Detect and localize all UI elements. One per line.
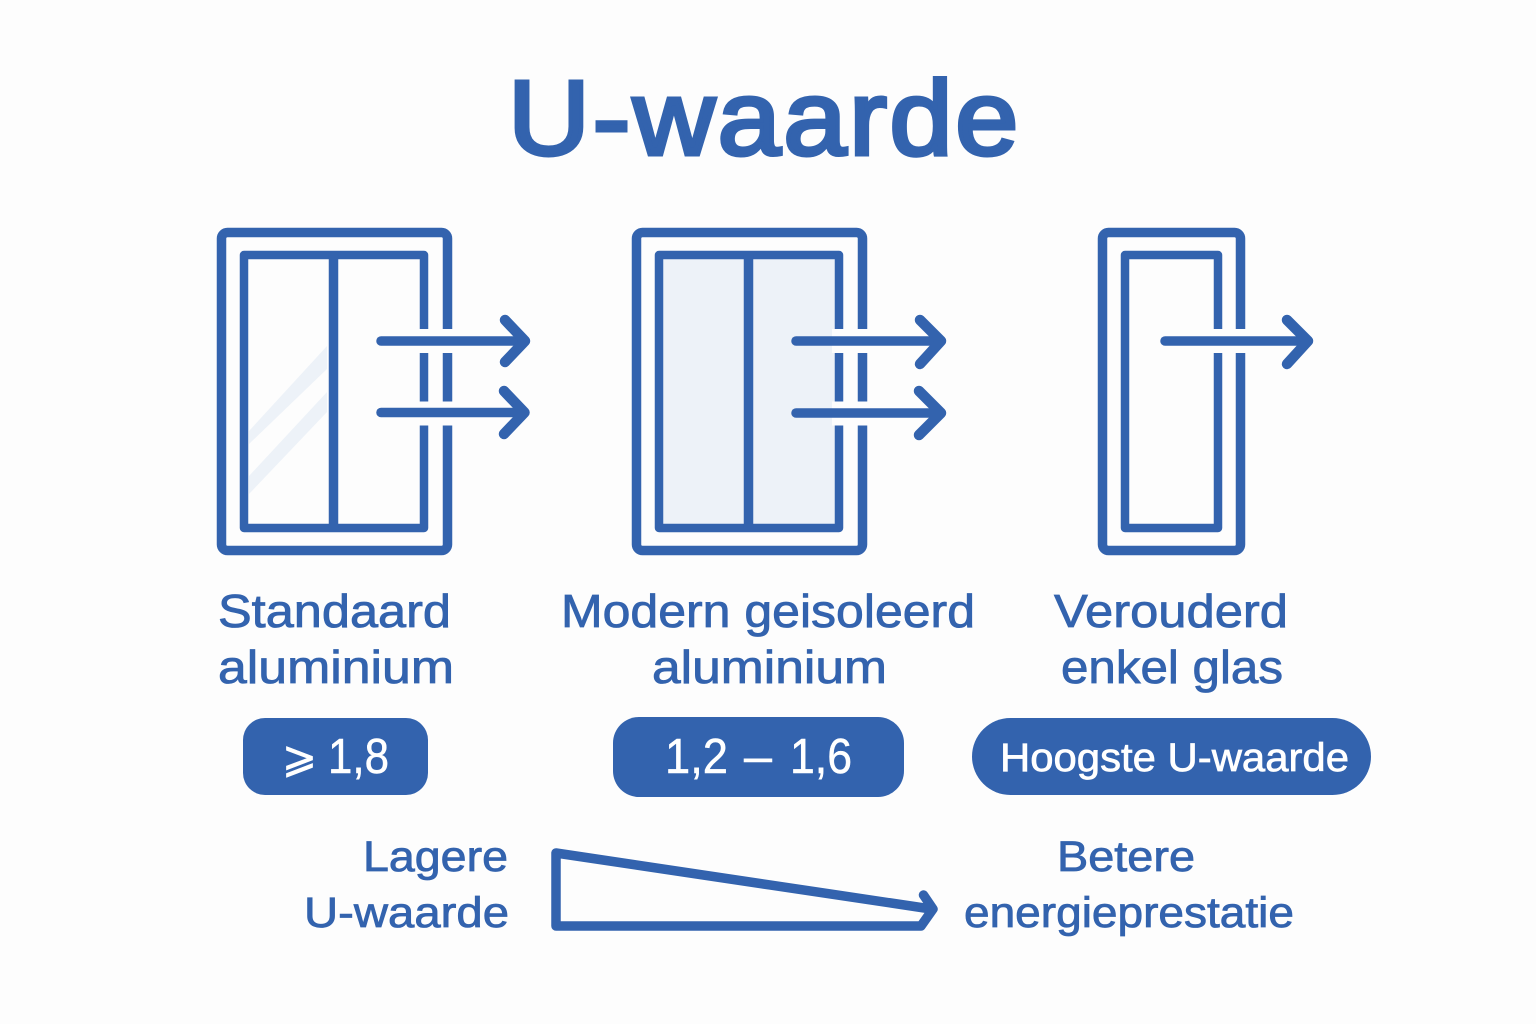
badge: hoogste U-waarde: Hoogste U-waarde bbox=[1000, 736, 1349, 780]
legend: lower U-value: Lagere bbox=[363, 833, 508, 881]
label: modern geisoleerd aluminium: aluminium bbox=[652, 641, 887, 693]
label: modern geisoleerd aluminium bbox=[561, 585, 975, 693]
panel: verouderd enkel glas bbox=[972, 232, 1371, 795]
icon: window standaard aluminium bbox=[222, 232, 455, 550]
badge: U-value at least 1,8: 1,8 bbox=[328, 730, 389, 784]
label: verouderd enkel glas: Verouderd bbox=[1054, 585, 1288, 637]
badge: U-value 1,2 to 1,6: 1,2 bbox=[665, 730, 728, 784]
panel: standaard aluminium bbox=[218, 232, 525, 795]
badge: U-value 1,2 to 1,6 bbox=[613, 717, 904, 797]
arrow: heat loss upper bbox=[381, 336, 522, 346]
badge: U-value at least 1,8 bbox=[243, 718, 428, 795]
badge: U-value 1,2 to 1,6: 1,6 bbox=[790, 730, 852, 784]
label: standaard aluminium: aluminium bbox=[218, 641, 454, 693]
label: standaard aluminium: Standaard bbox=[218, 585, 451, 637]
badge: U-value at least 1,8: ⩾ bbox=[282, 733, 317, 782]
legend: better energy performance bbox=[964, 833, 1294, 937]
legend: lower U-value: U-waarde bbox=[304, 889, 509, 937]
label: modern geisoleerd aluminium: Modern geisoleerd bbox=[561, 585, 975, 637]
arrow: heat loss lower bbox=[381, 408, 522, 417]
arrow: heat loss lower bbox=[796, 408, 938, 418]
legend: better energy performance: energieprestatie bbox=[964, 889, 1294, 937]
badge: hoogste U-waarde bbox=[972, 718, 1371, 795]
icon: window enkel glas bbox=[1102, 232, 1248, 550]
label: verouderd enkel glas bbox=[1054, 585, 1288, 693]
arrow: heat loss bbox=[1165, 336, 1305, 346]
arrow: wedge bbox=[556, 853, 933, 926]
label: verouderd enkel glas: enkel glas bbox=[1061, 641, 1283, 693]
arrow: heat loss upper bbox=[796, 336, 938, 346]
badge: U-value 1,2 to 1,6: – bbox=[744, 730, 773, 784]
label: standaard aluminium bbox=[218, 585, 454, 693]
title: U-waarde bbox=[508, 60, 1021, 178]
panel: modern geisoleerd aluminium bbox=[561, 232, 975, 797]
legend: better energy performance: Betere bbox=[1057, 833, 1195, 881]
icon: window modern geisoleerd bbox=[636, 232, 870, 550]
legend: lower U-value bbox=[304, 833, 509, 937]
